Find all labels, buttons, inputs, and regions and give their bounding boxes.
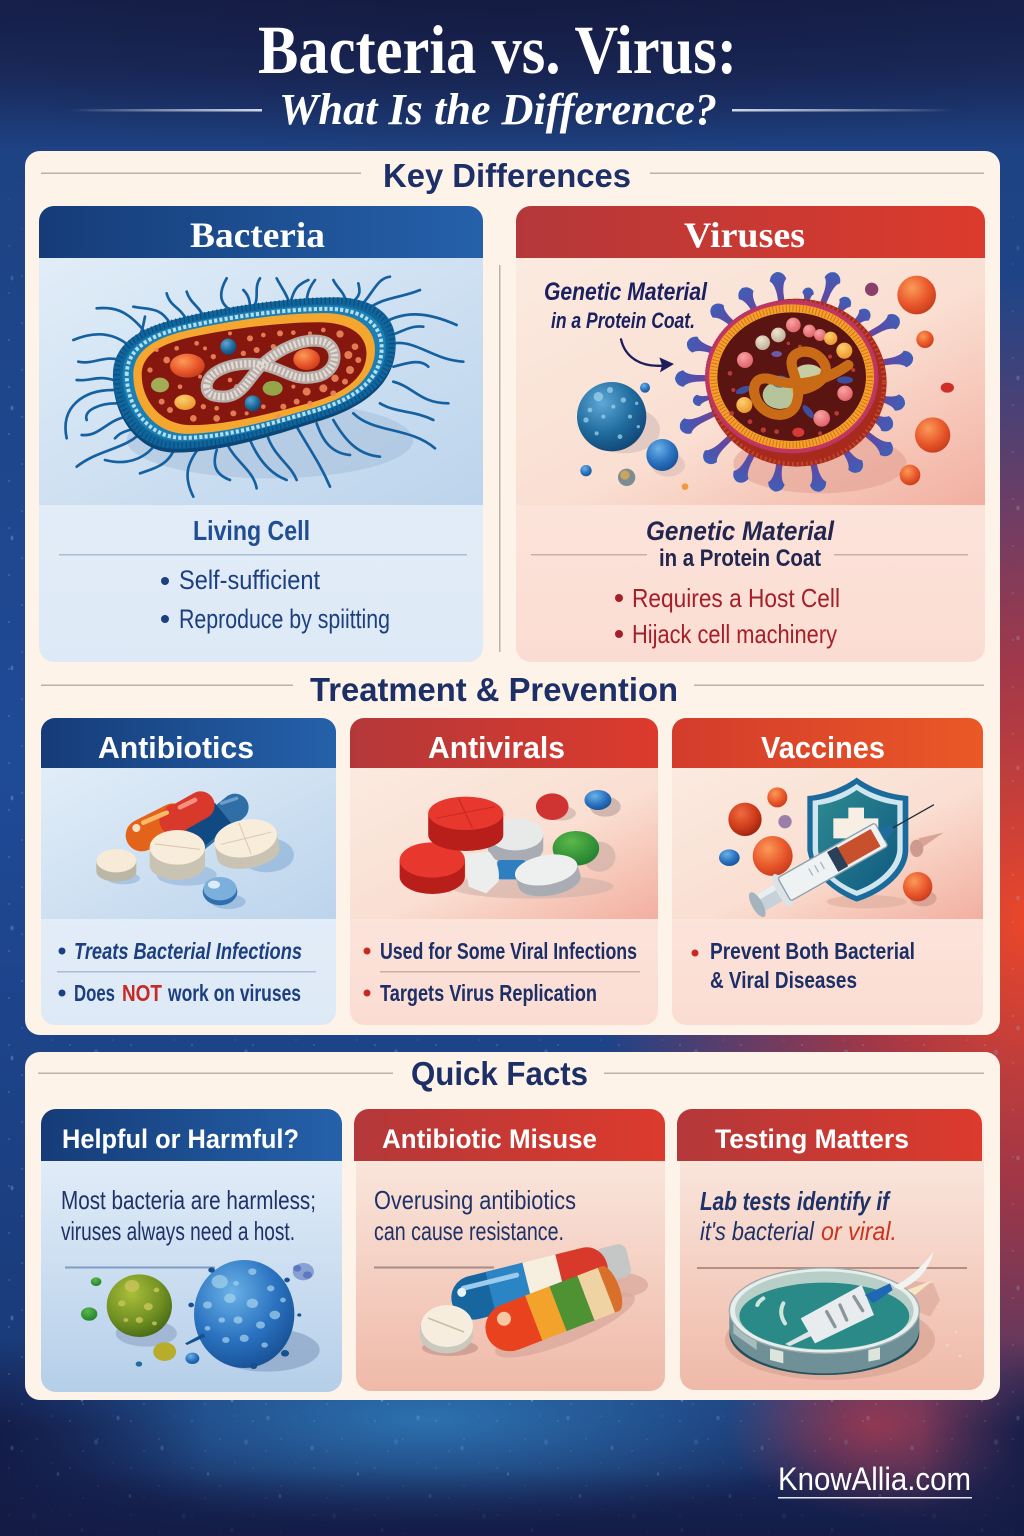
- body text: Most bacteria are harmless;: [61, 1185, 316, 1215]
- card: vaccines: Vaccines: [761, 730, 885, 765]
- illustration: antiviral pills: [400, 790, 621, 901]
- virus bullets: [615, 583, 840, 649]
- tablets: [96, 814, 282, 905]
- heading: key differences: Key Differences: [383, 157, 631, 194]
- illustration: antibiotic pills: [96, 798, 294, 909]
- antibiotics bullets: NOT: [122, 980, 162, 1006]
- heading: genetic material: Genetic Material: [646, 516, 834, 546]
- bacteria bullets: Self-sufficient: [179, 565, 320, 595]
- bacteria bullets: [161, 565, 390, 634]
- vaccines bullets: Prevent Both Bacterial: [710, 938, 915, 964]
- cytoplasm granules: [147, 328, 361, 422]
- antivirals bullets: Used for Some Viral Infections: [380, 938, 637, 964]
- body text: [61, 1185, 316, 1246]
- body text: can cause resistance.: [374, 1216, 564, 1246]
- card: testing matters: Testing Matters: [715, 1124, 909, 1154]
- vaccines bullets: & Viral Diseases: [710, 967, 857, 993]
- card: antivirals: [350, 718, 658, 1025]
- illustration: petri dish and swab: [725, 1252, 961, 1380]
- title: What Is the Difference?: [279, 85, 717, 134]
- virus particles: [577, 276, 954, 490]
- virus interior: [728, 318, 855, 437]
- callout: genetic material: Genetic Material: [544, 278, 708, 306]
- virus bullets: Hijack cell machinery: [632, 619, 837, 649]
- body text: it's bacterial: [700, 1216, 815, 1246]
- arrow: [621, 339, 674, 372]
- callout: genetic material: [544, 278, 708, 333]
- body text: or viral.: [821, 1216, 897, 1246]
- card: viruses: [516, 206, 985, 662]
- heading: genetic material: in a Protein Coat: [659, 545, 821, 572]
- card: bacteria: Bacteria: [190, 215, 325, 255]
- card: vaccines: [672, 718, 983, 1025]
- bacteria bullets: Reproduce by spiitting: [179, 604, 390, 634]
- body text: [374, 1185, 576, 1246]
- heading: living cell: Living Cell: [193, 515, 310, 546]
- antibiotics bullets: Does: [74, 980, 115, 1006]
- card: antibiotics: Antibiotics: [98, 730, 254, 765]
- antivirals bullets: [364, 938, 640, 1006]
- capsule: red orange green: [478, 1263, 627, 1358]
- panel: quick facts: [25, 1052, 1000, 1400]
- body text: Overusing antibiotics: [374, 1185, 576, 1215]
- heading: treatment and prevention: Treatment & Prevention: [310, 671, 678, 708]
- card: antibiotics: [41, 718, 336, 1025]
- virus spikes: [675, 269, 914, 494]
- body text: Lab tests identify if: [700, 1186, 891, 1216]
- antivirals bullets: Targets Virus Replication: [380, 980, 597, 1006]
- illustration: bacterium: [66, 277, 463, 497]
- vaccines bullets: [692, 938, 915, 993]
- heading: quick facts: Quick Facts: [411, 1055, 588, 1092]
- card: helpful or harmful: [41, 1109, 342, 1392]
- antibiotics bullets: work on viruses: [167, 980, 301, 1006]
- body text: [700, 1186, 897, 1246]
- card: antibiotic misuse: [354, 1109, 665, 1391]
- heading: genetic material: [531, 516, 968, 572]
- callout: genetic material: in a Protein Coat.: [551, 308, 695, 333]
- virus bullets: Requires a Host Cell: [632, 583, 840, 613]
- card: antibiotic misuse: Antibiotic Misuse: [382, 1124, 597, 1154]
- card: testing matters: [677, 1109, 984, 1390]
- nucleoid DNA: [207, 341, 335, 397]
- title: Bacteria vs. Virus:: [258, 12, 737, 88]
- illustration: green bacterium and blue virus: [81, 1260, 320, 1372]
- body text: viruses always need a host.: [61, 1216, 295, 1246]
- card: bacteria: [39, 206, 483, 662]
- card: viruses: Viruses: [684, 215, 805, 255]
- syringe: [744, 789, 943, 923]
- brand: knowallia.com: KnowAllia.com: [778, 1461, 971, 1497]
- card: helpful or harmful: Helpful or Harmful?: [62, 1124, 299, 1154]
- antibiotics bullets: [57, 938, 316, 1006]
- illustration: vaccine and shield: [719, 778, 943, 923]
- virus genetic material: [754, 352, 848, 415]
- title: [70, 12, 954, 134]
- panel: key differences and treatment: [25, 151, 1000, 1035]
- card: antivirals: Antivirals: [428, 730, 565, 765]
- tablet: [420, 1305, 473, 1353]
- illustration: virus: [577, 269, 954, 494]
- illustration: capsules and tablet: [420, 1238, 648, 1370]
- antibiotics bullets: Treats Bacterial Infections: [74, 938, 302, 964]
- capsule: blue white red: [447, 1238, 634, 1324]
